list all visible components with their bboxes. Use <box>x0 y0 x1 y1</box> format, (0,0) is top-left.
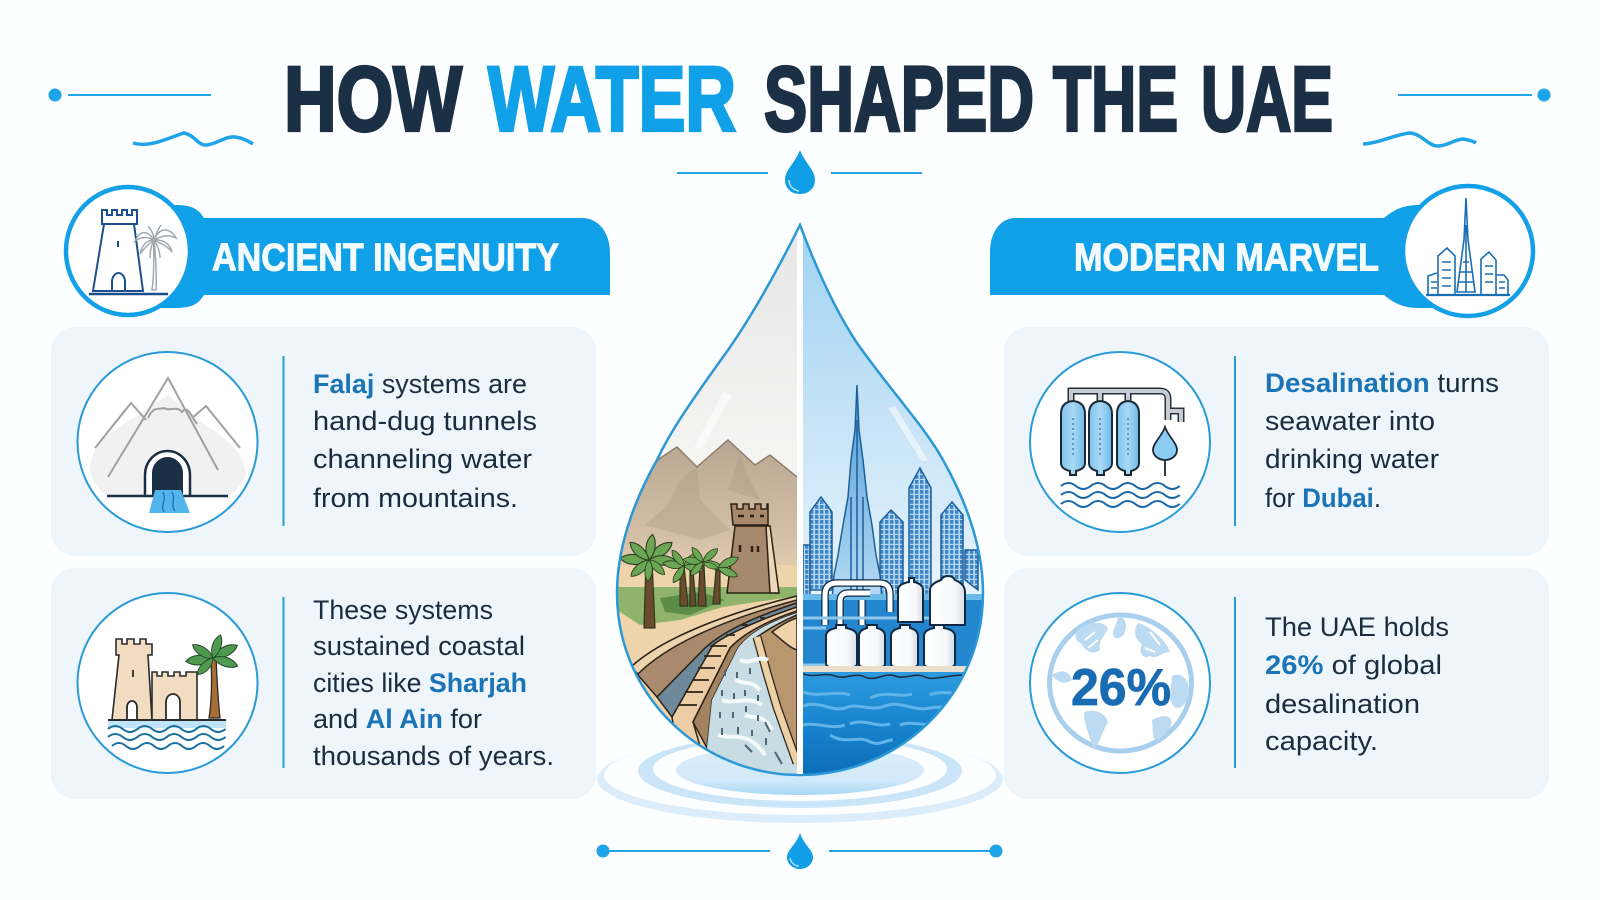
icon: watchtower and palm <box>66 187 190 315</box>
central water drop illustration <box>600 220 990 785</box>
icon: globe with 26 percent <box>1030 593 1210 773</box>
text block: drinking water <box>1265 444 1439 474</box>
icon: globe with 26 percent: 26% <box>1071 659 1171 717</box>
text block: These systems <box>313 595 493 625</box>
title: THE <box>1053 48 1178 150</box>
text block: seawater into <box>1265 406 1435 436</box>
icon: skyline <box>1403 186 1533 316</box>
heading: modern marvel <box>990 186 1533 316</box>
drop outline <box>617 225 983 775</box>
left half: ancient falaj scene <box>618 234 797 774</box>
title: HOW <box>284 48 462 150</box>
text block: thousands of years. <box>313 741 554 771</box>
divider <box>282 356 284 526</box>
text block <box>313 595 554 771</box>
bottom divider with water drop <box>596 833 1002 869</box>
falaj channel <box>631 596 797 775</box>
desalination plant pipes and tanks <box>803 576 965 668</box>
text block <box>1265 368 1499 513</box>
text block: and Al Ain for <box>313 704 482 734</box>
title decoration left: dot, line and wave <box>48 88 253 145</box>
panel: global capacity <box>1004 568 1549 799</box>
skyline towers <box>803 385 978 600</box>
text block: hand-dug tunnels <box>313 406 537 436</box>
text block: The UAE holds <box>1265 612 1449 642</box>
text block: for Dubai. <box>1265 483 1381 513</box>
heading: ancient ingenuity <box>66 187 610 315</box>
tower <box>727 504 779 593</box>
text block: capacity. <box>1265 726 1378 756</box>
sea waves <box>803 674 978 743</box>
title decoration right: dot, line and wave <box>1363 88 1550 146</box>
heading text: ANCIENT INGENUITY <box>212 236 559 280</box>
title: UAE <box>1201 48 1333 150</box>
panel: falaj systems <box>51 327 596 556</box>
panel: desalination <box>1004 327 1549 556</box>
text block: desalination <box>1265 689 1420 719</box>
text block: sustained coastal <box>313 631 525 661</box>
text block: 26% of global <box>1265 650 1442 680</box>
text block: channeling water <box>313 444 532 474</box>
title <box>284 48 1333 150</box>
icon: mountain tunnel <box>78 352 258 532</box>
title: SHAPED <box>764 48 1034 150</box>
text block: cities like Sharjah <box>313 668 527 698</box>
water ripples <box>597 734 1003 823</box>
divider <box>1234 356 1236 526</box>
icon: castle and palm <box>78 593 258 773</box>
icon: desalination filters <box>1030 352 1210 532</box>
heading text: MODERN MARVEL <box>1074 236 1379 280</box>
text block <box>313 369 537 513</box>
title: WATER <box>488 48 736 150</box>
right half: modern desalination scene <box>800 220 990 777</box>
divider <box>282 597 284 768</box>
divider <box>1234 597 1236 768</box>
text block: Falaj systems are <box>313 369 527 399</box>
text block: Desalination turns <box>1265 368 1499 398</box>
palm trees <box>620 534 740 628</box>
title divider with water drop <box>677 150 922 194</box>
panel: coastal cities <box>51 568 596 799</box>
text block <box>1265 612 1449 756</box>
text block: from mountains. <box>313 483 518 513</box>
